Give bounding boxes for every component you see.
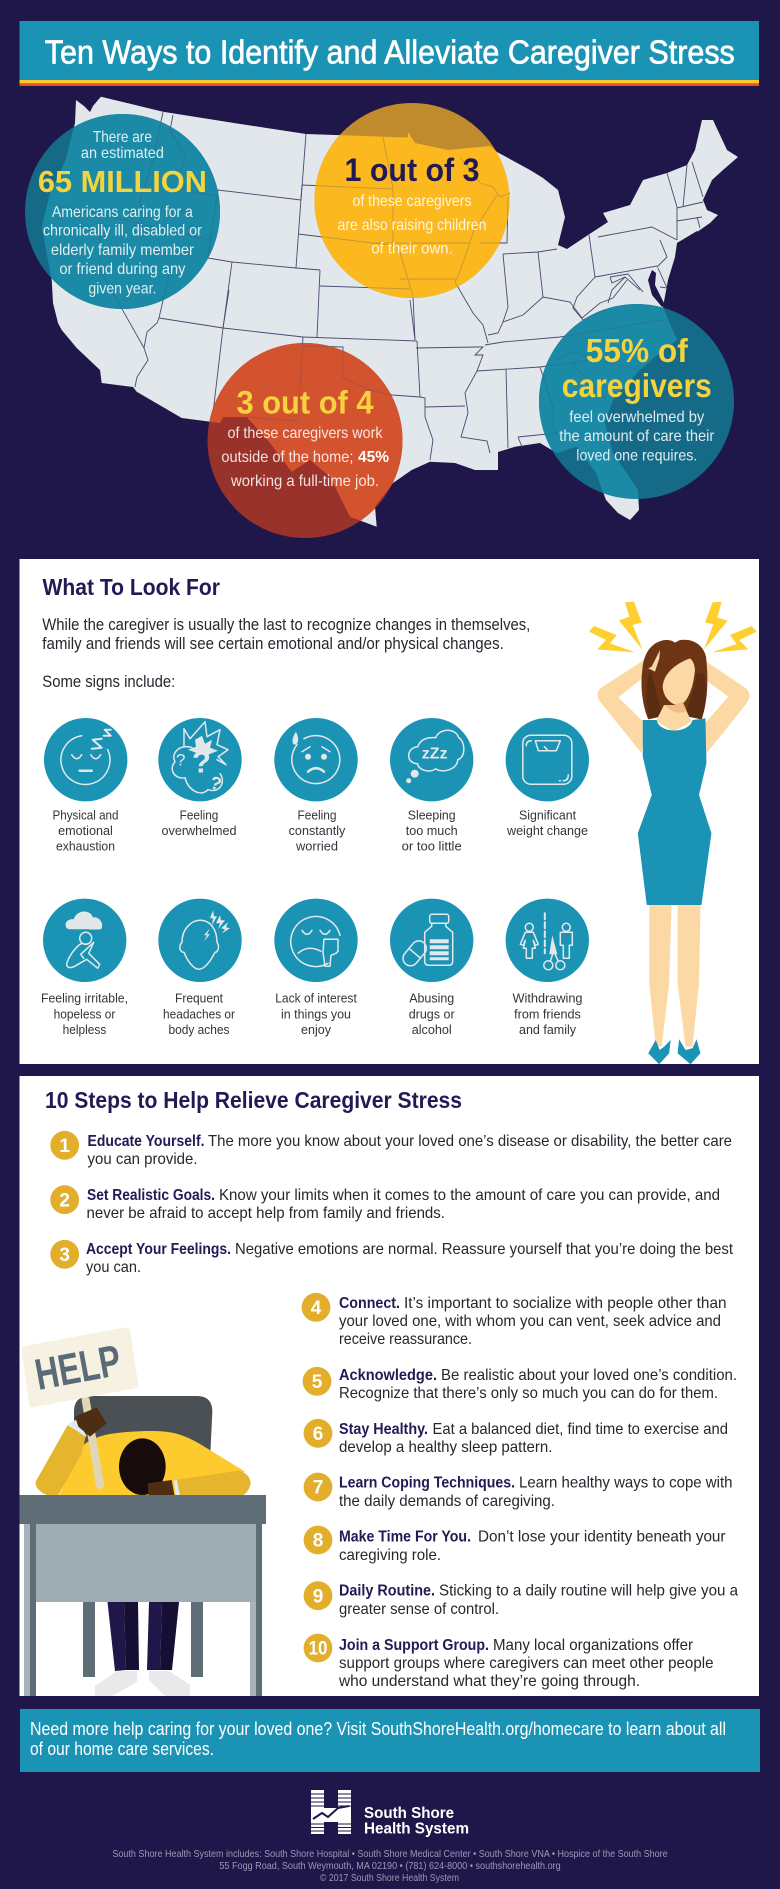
callout: 1 out of 3 bbox=[314, 103, 510, 298]
label: Feeling bbox=[298, 807, 336, 822]
callout: 3 out of 4: of these caregivers work bbox=[228, 425, 383, 442]
icon: burst and question marks: ? bbox=[176, 751, 185, 770]
callout: 1 out of 3: of these caregivers bbox=[352, 193, 472, 210]
step 3: Negative emotions are normal. Reassure yourself that you’re doing the best bbox=[235, 1241, 734, 1258]
step 7 bbox=[304, 1473, 732, 1510]
sign: overwhelmed bbox=[158, 718, 242, 838]
callout: 65 million: elderly family member bbox=[51, 242, 195, 259]
step 6: Eat a balanced diet, find time to exercise and bbox=[432, 1421, 728, 1438]
callout: 65 million: given year. bbox=[88, 281, 156, 298]
callout: 3 out of 4: 3 out of 4 bbox=[236, 385, 374, 421]
step 5: Recognize that there’s only so much you can do for them. bbox=[339, 1385, 718, 1402]
step 3: Accept Your Feelings. bbox=[86, 1241, 231, 1258]
step 1: you can provide. bbox=[88, 1151, 198, 1168]
step 4: It’s important to socialize with people other than bbox=[404, 1295, 726, 1312]
step 1 bbox=[50, 1131, 732, 1168]
step 2: 2 bbox=[59, 1190, 70, 1211]
logo: South Shore Health System: Health System bbox=[364, 1820, 469, 1838]
icon: person under a cloud bbox=[43, 899, 126, 982]
step 6: Stay Healthy. bbox=[339, 1421, 428, 1438]
step 6: 6 bbox=[313, 1424, 323, 1445]
callout: 55% of caregivers bbox=[539, 304, 734, 499]
step 9: Daily Routine. bbox=[339, 1583, 435, 1600]
label: enjoy bbox=[301, 1022, 331, 1037]
label: Significant bbox=[519, 807, 576, 822]
callout: 55% of caregivers: caregivers bbox=[562, 367, 712, 404]
step 7: the daily demands of caregiving. bbox=[339, 1493, 555, 1510]
label: constantly bbox=[289, 823, 346, 838]
step 3: 3 bbox=[59, 1245, 70, 1266]
upper body, chair and help sign bbox=[25, 1331, 251, 1504]
step 5: Acknowledge. bbox=[339, 1367, 437, 1384]
callout: 65 million bbox=[25, 114, 220, 309]
callout: 55% of caregivers: 55% of bbox=[586, 332, 689, 369]
step 1: The more you know about your loved one’s disease or disability, the better care bbox=[208, 1133, 732, 1150]
step 8: Don’t lose your identity beneath your bbox=[478, 1529, 726, 1546]
footer text: © 2017 South Shore Health System bbox=[320, 1872, 459, 1884]
sign: headaches bbox=[158, 899, 242, 1037]
label bbox=[402, 807, 462, 854]
label: Feeling bbox=[180, 807, 218, 822]
label: weight change bbox=[506, 823, 588, 838]
step 7: 7 bbox=[313, 1478, 323, 1499]
label: helpless bbox=[63, 1022, 107, 1037]
label: Frequent bbox=[175, 991, 223, 1006]
callout: 3 out of 4: outside of the home; bbox=[221, 449, 353, 466]
title: Ten Ways to Identify and Alleviate Caregiver Stress bbox=[45, 34, 735, 71]
step 2: Set Realistic Goals. bbox=[87, 1187, 215, 1204]
step 10: Join a Support Group. bbox=[339, 1637, 489, 1654]
sign: irritable bbox=[41, 899, 128, 1037]
desk bbox=[20, 1495, 266, 1696]
legs bbox=[95, 1602, 190, 1696]
step 9: greater sense of control. bbox=[339, 1601, 499, 1618]
callout: 55% of caregivers: loved one requires. bbox=[576, 448, 697, 465]
label bbox=[289, 807, 346, 854]
label: body aches bbox=[168, 1022, 230, 1037]
label: in things you bbox=[281, 1006, 351, 1021]
step 10: 10 bbox=[308, 1639, 328, 1660]
sign: worried bbox=[274, 718, 358, 854]
logo: South Shore Health System: South Shore bbox=[364, 1805, 454, 1822]
step 2: never be afraid to accept help from family and friends. bbox=[86, 1205, 445, 1222]
label bbox=[506, 807, 588, 838]
icon: sad face with thumbs down bbox=[274, 899, 358, 982]
sign: sleeping bbox=[390, 718, 473, 854]
label: Abusing bbox=[409, 991, 454, 1006]
icon: bathroom scale bbox=[506, 718, 589, 801]
callout: 55% of caregivers: feel overwhelmed by bbox=[569, 409, 704, 426]
sign: lack of interest bbox=[274, 899, 358, 1037]
intro text: family and friends will see certain emotional and/or physical changes. bbox=[42, 634, 504, 653]
step 5: Be realistic about your loved one’s condition. bbox=[441, 1367, 737, 1384]
step 10 bbox=[304, 1634, 714, 1690]
intro text bbox=[42, 615, 530, 691]
step 5: 5 bbox=[312, 1372, 323, 1393]
label: overwhelmed bbox=[162, 823, 236, 838]
call to action banner: of our home care services. bbox=[30, 1739, 214, 1759]
label bbox=[163, 991, 236, 1037]
label bbox=[275, 991, 357, 1037]
label: from friends bbox=[514, 1006, 581, 1021]
callout: 3 out of 4: working a full-time job. bbox=[230, 473, 379, 490]
callout: 65 million: an estimated bbox=[81, 145, 164, 162]
icon: head with lightning bbox=[158, 899, 242, 982]
step 7: Learn Coping Techniques. bbox=[339, 1474, 515, 1492]
callout: 3 out of 4 bbox=[208, 343, 402, 538]
illustration: exhausted caregiver at desk with help sign bbox=[20, 1331, 266, 1696]
icon: separated figures and scissors bbox=[506, 899, 589, 982]
step 8 bbox=[304, 1526, 726, 1564]
heading: what to look for: What To Look For bbox=[42, 574, 220, 600]
sign: weight change bbox=[506, 718, 589, 838]
step 9: 9 bbox=[313, 1586, 323, 1607]
heading: 10 steps: 10 Steps to Help Relieve Caregiver Stress bbox=[45, 1087, 462, 1113]
dress, legs and shoes bbox=[638, 718, 711, 1064]
illustration: stressed woman bbox=[589, 602, 757, 1064]
callout: 65 million: There are bbox=[93, 129, 152, 146]
head, arms and lightning bolts bbox=[589, 602, 757, 753]
callout: 3 out of 4: 45% bbox=[358, 449, 389, 466]
label: too much bbox=[406, 823, 458, 838]
icon: bottle and pill bbox=[390, 899, 473, 982]
callout: 1 out of 3: 1 out of 3 bbox=[344, 152, 480, 188]
step 6 bbox=[304, 1419, 728, 1456]
callout: 55% of caregivers: the amount of care their bbox=[559, 428, 715, 445]
step 4 bbox=[302, 1293, 726, 1348]
step 5 bbox=[303, 1367, 737, 1402]
logo mark bbox=[311, 1790, 351, 1834]
step 10: who understand what they’re going through. bbox=[338, 1673, 640, 1690]
label bbox=[41, 991, 128, 1037]
call to action banner bbox=[20, 1709, 760, 1772]
step 2: Know your limits when it comes to the amount of care you can provide, and bbox=[219, 1187, 720, 1204]
callout: 65 million: Americans caring for a bbox=[52, 204, 193, 221]
step 4: receive reassurance. bbox=[339, 1331, 472, 1348]
icon: burst and question marks bbox=[158, 718, 242, 801]
label: Lack of interest bbox=[275, 991, 357, 1006]
footer text: 55 Fogg Road, South Weymouth, MA 02190 • (781) 624-8000 • southshorehealth.org bbox=[219, 1860, 561, 1872]
icon: burst and question marks: ? bbox=[192, 745, 211, 780]
step 7: Learn healthy ways to cope with bbox=[519, 1474, 732, 1492]
logo: South Shore Health System bbox=[311, 1790, 469, 1838]
help sign: HELP bbox=[31, 1336, 125, 1400]
intro text: Some signs include: bbox=[42, 672, 175, 691]
icon: thought cloud: zZz bbox=[422, 746, 448, 763]
panel: 10 steps bbox=[20, 1076, 759, 1696]
intro text: While the caregiver is usually the last to recognize changes in themselves, bbox=[42, 615, 530, 634]
step 3 bbox=[50, 1240, 734, 1276]
footer text bbox=[112, 1848, 668, 1884]
callout: 65 million: or friend during any bbox=[59, 261, 185, 278]
step 10: Many local organizations offer bbox=[493, 1637, 693, 1654]
label: worried bbox=[295, 839, 338, 854]
step 1: 1 bbox=[59, 1136, 70, 1157]
label: exhaustion bbox=[56, 839, 115, 854]
step 9 bbox=[304, 1581, 738, 1618]
label: alcohol bbox=[412, 1022, 452, 1037]
step 4: your loved one, with whom you can vent, seek advice and bbox=[339, 1313, 721, 1330]
footer text: South Shore Health System includes: South Shore Hospital • South Shore Medical Center • South Shore VNA • Hospice of the South Shore bbox=[112, 1848, 668, 1860]
map of the United States bbox=[42, 97, 738, 527]
panel: what to look for bbox=[20, 559, 759, 1064]
step 2 bbox=[50, 1185, 720, 1222]
step 3: you can. bbox=[86, 1259, 141, 1276]
label: headaches or bbox=[163, 1006, 236, 1021]
step 4: Connect. bbox=[339, 1295, 400, 1312]
step 9: Sticking to a daily routine will help give you a bbox=[439, 1583, 738, 1600]
sign: withdrawing bbox=[506, 899, 589, 1037]
callout: 65 million: chronically ill, disabled or bbox=[43, 223, 203, 240]
label: Withdrawing bbox=[512, 991, 582, 1006]
title banner bbox=[20, 21, 759, 86]
label: Sleeping bbox=[408, 807, 456, 822]
callout: 65 million: 65 MILLION bbox=[38, 164, 207, 199]
label: drugs or bbox=[409, 1006, 455, 1021]
step 8: caregiving role. bbox=[339, 1547, 441, 1564]
callout: 1 out of 3: are also raising children bbox=[338, 217, 486, 234]
sign: abusing drugs bbox=[390, 899, 473, 1037]
icon: tired face bbox=[44, 718, 127, 801]
label: hopeless or bbox=[54, 1006, 116, 1021]
label: Feeling irritable, bbox=[41, 991, 128, 1006]
step 1: Educate Yourself. bbox=[88, 1133, 204, 1150]
icon: burst and question marks: ? bbox=[208, 772, 224, 794]
step 6: develop a healthy sleep pattern. bbox=[339, 1439, 552, 1456]
label bbox=[512, 991, 582, 1037]
label: and family bbox=[519, 1022, 576, 1037]
label: emotional bbox=[58, 823, 113, 838]
callout: 1 out of 3: of their own. bbox=[371, 241, 453, 258]
label bbox=[162, 807, 236, 838]
label: Physical and bbox=[52, 807, 118, 822]
step 10: support groups where caregivers can meet other people bbox=[339, 1655, 714, 1672]
label bbox=[409, 991, 455, 1037]
icon: worried face bbox=[274, 718, 358, 801]
label: or too little bbox=[402, 839, 462, 854]
sign: exhaustion bbox=[44, 718, 127, 854]
step 8: Make Time For You. bbox=[339, 1529, 471, 1546]
label bbox=[52, 807, 118, 854]
step 4: 4 bbox=[311, 1298, 322, 1319]
step 8: 8 bbox=[313, 1531, 323, 1552]
